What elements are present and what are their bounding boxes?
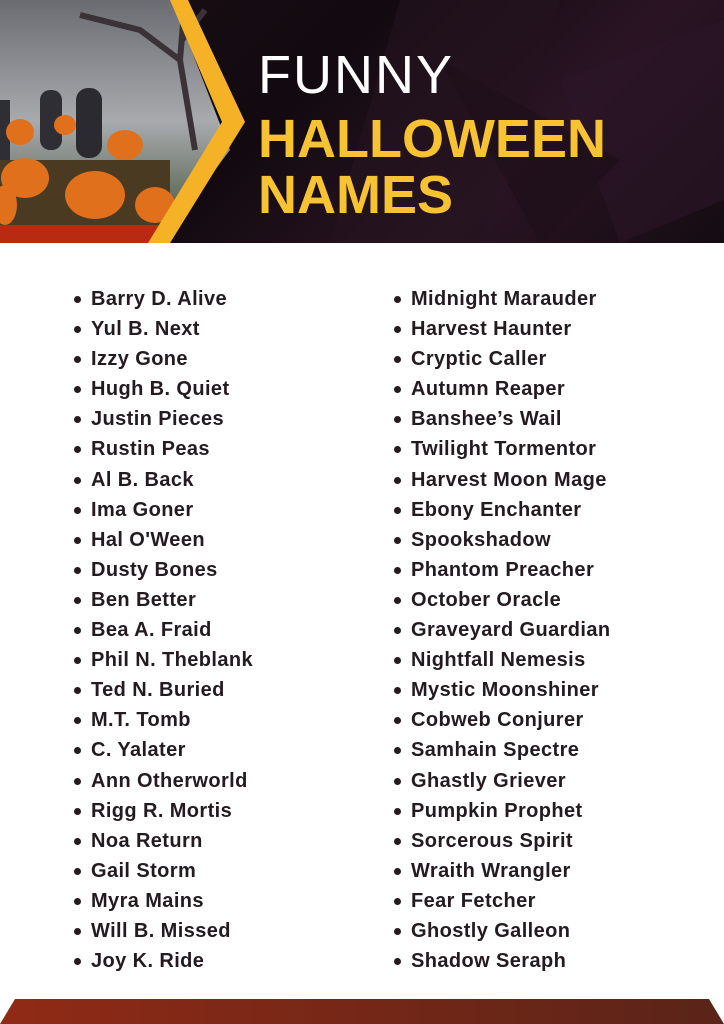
list: left column: M.T. Tomb (91, 709, 191, 731)
footer band (0, 999, 724, 1024)
list: right column: Shadow Seraph (411, 950, 566, 972)
list: left column: Ted N. Buried (91, 679, 225, 701)
chevron stripe (148, 0, 245, 243)
list: right column (394, 288, 611, 972)
list: left column: Yul B. Next (91, 318, 200, 340)
header background pattern (387, 0, 724, 242)
list: right column: Autumn Reaper (411, 378, 565, 400)
list: right column: Pumpkin Prophet (411, 800, 583, 822)
list: right column: Ghostly Galleon (411, 920, 570, 942)
list: right column: Wraith Wrangler (411, 860, 571, 882)
list: left column: Ima Goner (91, 499, 194, 521)
list: left column: Will B. Missed (91, 920, 231, 942)
list: left column (74, 288, 253, 972)
list: left column: Hugh B. Quiet (91, 378, 230, 400)
header banner (0, 0, 724, 243)
list: right column: Twilight Tormentor (411, 438, 596, 460)
list: left column: Dusty Bones (91, 559, 218, 581)
list: left column: Gail Storm (91, 860, 196, 882)
header banner: FUNNY (258, 45, 454, 105)
list: left column: Ann Otherworld (91, 770, 248, 792)
list: left column: Rigg R. Mortis (91, 800, 232, 822)
list: right column: Banshee’s Wail (411, 408, 562, 430)
list: right column: Mystic Moonshiner (411, 679, 599, 701)
list: left column: Al B. Back (91, 469, 194, 491)
list: left column: C. Yalater (91, 739, 186, 761)
header banner: NAMES (258, 165, 453, 225)
list: left column: Hal O'Ween (91, 529, 205, 551)
list: right column: Ebony Enchanter (411, 499, 581, 521)
list: right column: Ghastly Griever (411, 770, 566, 792)
list: right column: Nightfall Nemesis (411, 649, 586, 671)
list: right column: October Oracle (411, 589, 561, 611)
list: left column: Myra Mains (91, 890, 204, 912)
list: left column: Rustin Peas (91, 438, 210, 460)
header banner: HALLOWEEN (258, 109, 606, 169)
list: right column: Cobweb Conjurer (411, 709, 584, 731)
list: right column: Cryptic Caller (411, 348, 547, 370)
list: left column: Ben Better (91, 589, 196, 611)
list: right column: Harvest Haunter (411, 318, 572, 340)
list: left column: Izzy Gone (91, 348, 188, 370)
list: left column: Phil N. Theblank (91, 649, 253, 671)
list: right column: Sorcerous Spirit (411, 830, 573, 852)
list: right column: Midnight Marauder (411, 288, 597, 310)
list: right column: Samhain Spectre (411, 739, 579, 761)
graveyard image (0, 0, 245, 243)
title (258, 45, 606, 225)
list: right column: Harvest Moon Mage (411, 469, 607, 491)
list: left column: Barry D. Alive (91, 288, 227, 310)
list: left column: Joy K. Ride (91, 950, 204, 972)
list: right column: Fear Fetcher (411, 890, 536, 912)
list: left column: Bea A. Fraid (91, 619, 212, 641)
list: right column: Phantom Preacher (411, 559, 594, 581)
list: left column: Justin Pieces (91, 408, 224, 430)
list: right column: Spookshadow (411, 529, 551, 551)
list: left column: Noa Return (91, 830, 203, 852)
list: right column: Graveyard Guardian (411, 619, 611, 641)
